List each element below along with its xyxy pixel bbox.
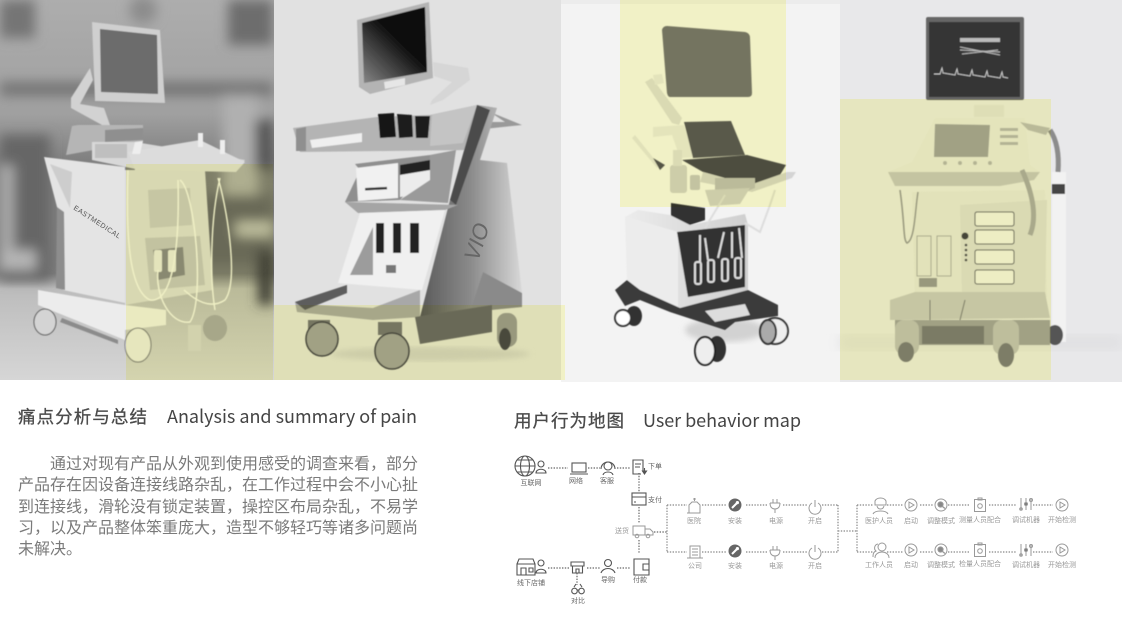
label: internet: 互联网 [520, 478, 542, 488]
machine in photo 2 [293, 2, 522, 369]
label: inspection staff cooperation: 检量人员配合 [959, 559, 1001, 569]
icon: company building [687, 546, 703, 558]
label: customer service: 客服 [600, 476, 614, 486]
yellow highlight: photo 3 screens [620, 0, 786, 207]
floor shadow [685, 318, 765, 342]
label: pay: 支付 [648, 495, 662, 505]
icon: adjust mode [935, 499, 947, 511]
yellow highlight: photo 1 trolley area [126, 164, 273, 380]
label: start: 开启 [808, 561, 822, 571]
yellow highlight: photo 2 wheels [274, 305, 565, 380]
text on machine: brand: EASTMEDICAL [72, 205, 122, 241]
icon: sliders [1020, 498, 1032, 510]
text block: pain analysis paragraph: 产品存在因设备连接线路杂乱，在工作过程中会不小心扯 [18, 471, 418, 495]
label: tune machine: 调试机器 [1012, 515, 1040, 525]
machine in photo 4 [888, 17, 1066, 367]
label: network: 网络 [569, 476, 583, 486]
icon: small store [571, 562, 584, 573]
heading: pain analysis [18, 403, 417, 429]
label: start up: 启动 [904, 516, 918, 526]
icon: store and user [517, 559, 546, 575]
text on machine: model: VIO [459, 220, 494, 264]
machine in photo 1 [34, 22, 245, 362]
label: delivery: 送货 [615, 526, 629, 536]
panel: photo 2, grey ultrasound machine [274, 0, 561, 380]
icon: sliders [1020, 544, 1032, 556]
label: shopping guide: 导购 [601, 575, 615, 585]
panel: photo 3, white cart ultrasound machine [561, 0, 840, 382]
label: company: 公司 [688, 561, 702, 571]
icon: payment card [632, 493, 646, 505]
label: install: 安装 [728, 516, 742, 526]
icon: adjust mode [935, 544, 947, 556]
label: start: 开启 [808, 516, 822, 526]
label: offline store: 线下店铺 [517, 578, 545, 588]
icon: wallet [634, 559, 649, 575]
label: hospital: 医院 [687, 516, 701, 526]
text block: pain analysis paragraph: 通过对现有产品从外观到使用感受的调查来看，部分 [50, 450, 418, 474]
label: adjust mode: 调整模式 [927, 516, 955, 526]
text block: pain analysis paragraph: 习，以及产品整体笨重庞大，造型不够轻巧等诸多问题尚 [18, 514, 418, 538]
heading: pain analysis: 痛点分析与总结 [18, 404, 147, 429]
icon: clipboard [974, 498, 986, 512]
panel: photo 4, beige ultrasound machine [840, 0, 1122, 382]
text block: pain analysis paragraph [18, 450, 418, 559]
text block: pain analysis paragraph: 到连接线，滑轮没有锁定装置，操控区布局杂乱，不易学 [18, 493, 418, 517]
dotted connectors [548, 468, 1053, 585]
icon: glasses [572, 584, 584, 594]
icon: wrench [728, 544, 742, 558]
heading: pain analysis: Analysis and summary of pain [167, 403, 417, 429]
icon: order [633, 460, 646, 474]
label: medical staff: 医护人员 [865, 516, 893, 526]
floor shadow [330, 347, 530, 361]
heading: user behavior map: 用户行为地图 [514, 408, 624, 433]
yellow highlight: photo 4 body [840, 99, 1051, 380]
text block: pain analysis paragraph: 未解决。 [18, 535, 82, 559]
label: install: 安装 [728, 561, 742, 571]
label: tune machine: 调试机器 [1012, 560, 1040, 570]
label: power: 电源 [769, 561, 783, 571]
icon: clipboard [974, 543, 986, 556]
icon: customer service [601, 462, 615, 475]
label: compare: 对比 [571, 596, 585, 606]
heading: user behavior map: User behavior map [643, 407, 801, 433]
icon: hospital [687, 498, 700, 513]
chart: user behavior flow map [515, 456, 1076, 606]
icon: power button [809, 500, 821, 514]
label: adjust mode: 调整模式 [927, 560, 955, 570]
icon: shopping guide [601, 560, 615, 573]
label: power: 电源 [769, 516, 783, 526]
label: staff: 工作人员 [865, 560, 893, 570]
icon: plug [770, 546, 780, 560]
icon: power button [809, 545, 821, 559]
label: begin test: 开始检测 [1048, 515, 1076, 525]
label: payment: 付款 [633, 575, 647, 585]
heading: user behavior map [514, 407, 801, 433]
icon: laptop [570, 463, 588, 474]
icon: workers [873, 543, 889, 558]
icon: play [1056, 499, 1068, 511]
icon: play [905, 499, 917, 511]
icon: nurse [873, 498, 888, 514]
icon: delivery truck [633, 526, 653, 538]
icon: plug [770, 499, 780, 513]
label: order: 下单 [648, 462, 662, 472]
icon: play [1056, 544, 1068, 556]
icon: play [905, 544, 917, 556]
label: measuring staff cooperation: 测量人员配合 [959, 515, 1001, 525]
label: start up: 启动 [904, 560, 918, 570]
icon: wrench [728, 498, 742, 512]
floor shadow [840, 335, 1122, 350]
panel: photo 1, ultrasound machine in a clinic room [0, 0, 274, 380]
label: begin test: 开始检测 [1048, 560, 1076, 570]
machine in photo 3 [615, 26, 796, 365]
icon: globe and user [515, 456, 546, 476]
